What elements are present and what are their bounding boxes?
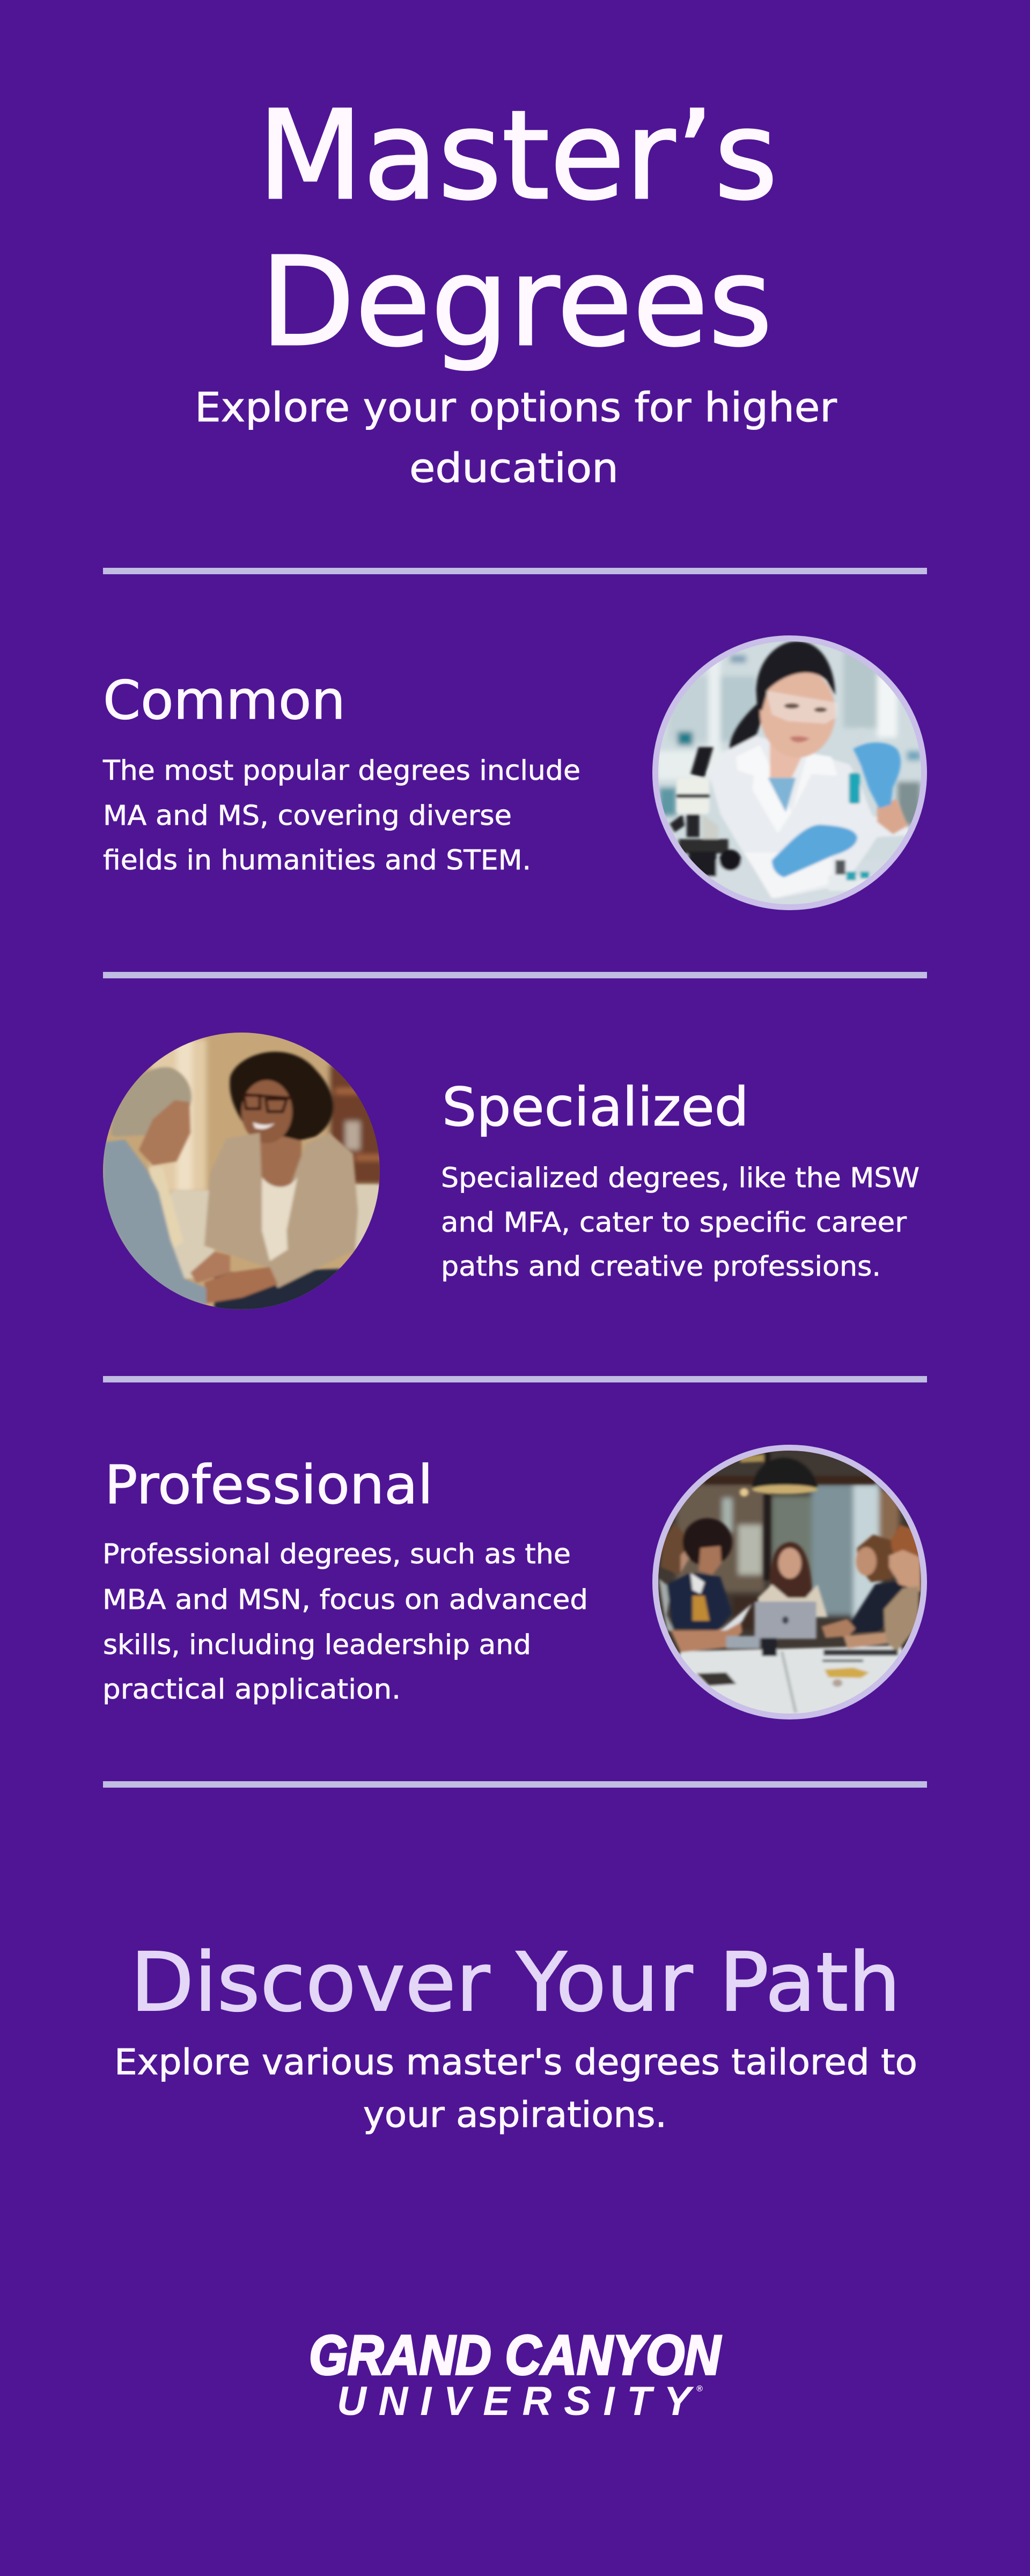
panel: specialized (91, 1020, 919, 1320)
text block: specialized description (441, 1162, 919, 1283)
text block: specialized description: paths and creative professions. (441, 1251, 881, 1283)
text block: professional description: practical application. (102, 1674, 401, 1706)
infographic canvas (103, 107, 927, 2415)
text block: common description: The most popular degrees include (102, 755, 580, 787)
photo: counselor with client (103, 1033, 380, 1309)
text block: common description: MA and MS, covering diverse (103, 800, 512, 832)
text block: professional description: skills, including leadership and (103, 1629, 531, 1661)
text block: specialized description: Specialized degrees, like the MSW (441, 1162, 919, 1194)
heading: professional: Professional (105, 1454, 433, 1516)
text block: common description: fields in humanities and STEM. (103, 845, 531, 876)
panel: common (103, 635, 927, 910)
text block: common description (102, 755, 580, 876)
heading: specialized: Specialized (442, 1077, 749, 1138)
photo: team meeting (652, 1445, 927, 1719)
photo ring (656, 1448, 924, 1716)
subtitle: Explore your options for higher (195, 384, 837, 431)
text block: specialized description: and MFA, cater to specific career (441, 1207, 907, 1239)
text block: professional description: Professional degrees, such as the (102, 1539, 571, 1570)
closing heading: Discover Your Path (130, 1935, 901, 2030)
logo: Grand Canyon University: UNIVERSITY (337, 2379, 694, 2424)
text block: professional description: MBA and MSN, focus on advanced (102, 1584, 588, 1616)
title: Degrees (260, 231, 772, 374)
logo: Grand Canyon University: GRAND CANYON (309, 2324, 722, 2387)
closing text: your aspirations. (363, 2094, 667, 2135)
logo: Grand Canyon University (309, 2324, 722, 2424)
closing text: Explore various master's degrees tailored to (114, 2041, 917, 2083)
closing text (114, 2041, 917, 2135)
heading: common: Common (103, 670, 345, 731)
panel: professional (104, 1445, 927, 1719)
photo ring (656, 639, 924, 907)
subtitle: education (409, 444, 619, 492)
text block: professional description (102, 1539, 588, 1706)
subtitle (195, 384, 837, 492)
logo: Grand Canyon University: ® (696, 2384, 703, 2394)
title (258, 84, 778, 374)
photo: scientist in lab (652, 635, 927, 910)
title: Master’s (258, 84, 778, 228)
